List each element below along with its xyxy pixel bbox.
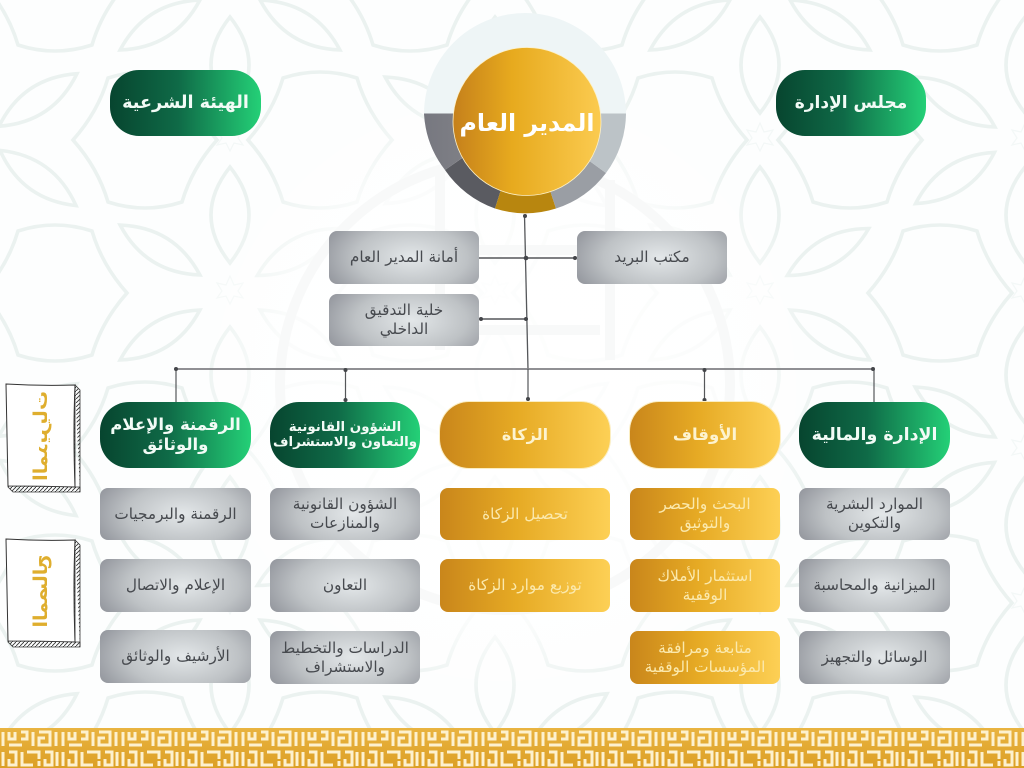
pill heading [440, 402, 610, 468]
column: administration and finance [799, 402, 950, 684]
box: general manager secretariat: أمانة المدير العام [350, 248, 458, 266]
box: الميزانية والمحاسبة [813, 576, 936, 594]
box: البحث والحصر [659, 495, 751, 513]
box [799, 631, 950, 684]
box: الرقمنة والبرمجيات [114, 504, 237, 522]
box: الأرشيف والوثائق [121, 647, 230, 665]
box: الدراسات والتخطيط [281, 638, 409, 656]
pill heading: والوثائق [143, 435, 208, 454]
box: توزيع موارد الزكاة [468, 576, 582, 594]
box: internal audit cell: الداخلي [380, 320, 428, 338]
column: legal affairs [270, 402, 420, 684]
box: والمنازعات [310, 514, 380, 532]
box [440, 559, 610, 612]
box [440, 488, 610, 540]
box: تحصيل الزكاة [482, 504, 568, 522]
box: الوسائل والتجهيز [822, 648, 927, 666]
box: الشؤون القانونية [293, 495, 397, 513]
box: الوقفية [683, 586, 727, 604]
box: استثمار الأملاك [658, 566, 752, 584]
box: internal audit cell [329, 294, 479, 346]
note: directorates [6, 384, 80, 492]
column: zakat [439, 401, 611, 612]
column: endowments [629, 401, 781, 684]
box: mail office: مكتب البريد [614, 248, 690, 266]
box [630, 488, 780, 540]
pill heading: الزكاة [502, 425, 548, 444]
box [630, 559, 780, 612]
pill heading: الأوقاف [673, 425, 737, 444]
pill heading [799, 402, 950, 468]
box: والتكوين [848, 514, 901, 532]
note: directorates: المديريات [30, 391, 52, 481]
box [100, 630, 251, 683]
pill heading [630, 402, 780, 468]
box: internal audit cell: خلية التدقيق [365, 301, 443, 319]
box [270, 631, 420, 684]
pill: board of directors [776, 70, 926, 136]
box [100, 488, 251, 540]
box: المؤسسات الوقفية [645, 658, 765, 676]
pill: sharia board [110, 70, 261, 136]
heading: general manager: المدير العام [459, 109, 595, 137]
box [799, 559, 950, 612]
box: الموارد البشرية [826, 495, 923, 513]
pill heading: الإدارة والمالية [812, 425, 937, 445]
box: متابعة ومرافقة [658, 638, 752, 656]
column: digitization, media and documents [100, 402, 251, 683]
note: services [6, 538, 80, 648]
pill heading: والتعاون والاستشراف [273, 435, 417, 450]
box: general manager secretariat [329, 231, 479, 284]
pill: board of directors: مجلس الإدارة [795, 93, 907, 113]
box [270, 559, 420, 612]
pill heading [270, 402, 420, 468]
box [630, 631, 780, 684]
decorative kufic band [0, 728, 1024, 768]
pill heading [100, 402, 251, 468]
pill: sharia board: الهيئة الشرعية [122, 93, 249, 113]
general manager emblem [424, 13, 626, 214]
pill heading: الرقمنة والإعلام [110, 415, 241, 434]
note: services: المصالح [30, 554, 52, 628]
box [799, 488, 950, 540]
pill heading: الشؤون القانونية [289, 420, 401, 435]
box [270, 488, 420, 540]
box: والاستشراف [305, 658, 385, 676]
box [100, 559, 251, 612]
box: الإعلام والاتصال [126, 576, 225, 594]
box: التعاون [323, 576, 367, 594]
box: والتوثيق [680, 514, 730, 532]
box: mail office [577, 231, 727, 284]
